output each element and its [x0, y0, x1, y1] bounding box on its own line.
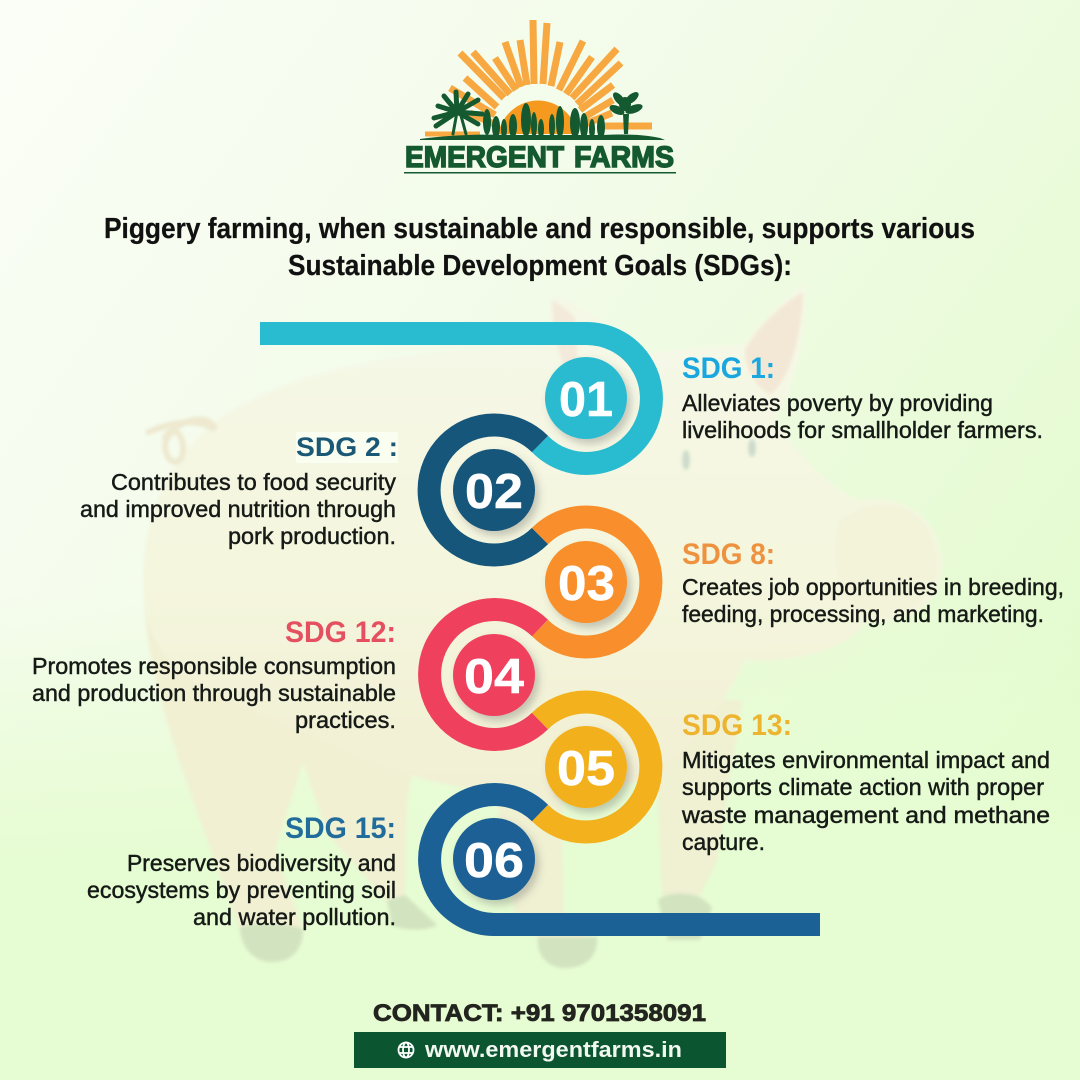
text block: SDG 1: livelihoods for smallholder farmers.: [682, 417, 1043, 443]
ring 03: [540, 517, 651, 647]
ring 04: [430, 610, 540, 739]
pig body: [143, 283, 942, 796]
text block: SDG 15: Preserves biodiversity and: [127, 850, 396, 876]
heading: [104, 213, 975, 282]
text block: SDG 12: SDG 12:: [285, 616, 396, 649]
badge 04: 04: [464, 650, 524, 704]
ring 05: [540, 702, 651, 832]
heading: Piggery farming, when sustainable and responsible, supports various: [104, 213, 975, 245]
badge 04: [453, 634, 535, 716]
text block: SDG 8: [682, 538, 1064, 627]
badge 05: [545, 726, 627, 808]
text block: SDG 13: SDG 13:: [682, 709, 792, 742]
badge 03: 03: [558, 557, 615, 611]
logo wordmark: EMERGENT: [405, 141, 564, 174]
icon: globe: [398, 1042, 414, 1058]
pig hooves: [240, 893, 712, 968]
pig eyes: [682, 439, 756, 470]
pig rear legs: [145, 610, 420, 930]
logo underline: [404, 172, 676, 174]
text block: SDG 2: SDG 2 :: [296, 432, 398, 462]
badge 05: 05: [557, 742, 615, 796]
text block: SDG 12: [32, 616, 396, 733]
pig watermark: [143, 283, 942, 968]
pig front legs: [495, 700, 742, 942]
text block: SDG 8: feeding, processing, and marketing.: [682, 601, 1044, 627]
contact line: CONTACT: +91 9701358091: [373, 1000, 706, 1027]
text block: SDG 2: Contributes to food security: [111, 469, 396, 495]
text block: SDG 1: Alleviates poverty by providing: [682, 390, 993, 416]
text block: SDG 13: waste management and methane: [681, 802, 1050, 828]
heading: Sustainable Development Goals (SDGs):: [288, 250, 792, 282]
logo left palm: [434, 92, 482, 134]
badge 06: [453, 818, 535, 900]
ring 01: [260, 333, 651, 463]
logo wordmark: FARMS: [574, 141, 674, 174]
text block: SDG 13: [681, 709, 1050, 855]
website bar: [354, 1032, 726, 1068]
text block: SDG 15: and water pollution.: [193, 904, 396, 930]
text block: SDG 13: capture.: [682, 829, 765, 855]
logo wordmark: [405, 141, 674, 174]
text block: SDG 12: and production through sustainable: [32, 680, 396, 706]
badge 01: [545, 357, 627, 439]
text block: SDG 15: ecosystems by preventing soil: [87, 877, 396, 903]
text block: SDG 15: SDG 15:: [285, 812, 396, 845]
text block: SDG 1: SDG 1:: [682, 352, 775, 385]
pig snout: [835, 504, 938, 618]
logo small trees and ground: [420, 103, 665, 140]
logo sun: [498, 100, 578, 134]
text block: SDG 2: [80, 432, 398, 549]
logo sun rays: [425, 20, 652, 134]
pig left ear: [552, 300, 580, 400]
pig tail: [146, 419, 215, 462]
pig ear inner: [745, 292, 803, 395]
logo right tree: [608, 90, 644, 134]
text block: SDG 15: [87, 812, 396, 930]
ring 06: [430, 795, 820, 924]
badge 02: [453, 449, 535, 531]
text block: SDG 12: Promotes responsible consumption: [32, 653, 396, 679]
ring 02: [429, 425, 540, 555]
text block: SDG 13: supports climate action with proper: [682, 774, 1044, 800]
text block: SDG 1: [682, 352, 1043, 443]
text block: SDG 2: and improved nutrition through: [80, 496, 396, 522]
text block: SDG 12: practices.: [295, 707, 396, 733]
text block: SDG 8: Creates job opportunities in breeding,: [682, 574, 1064, 600]
text block: SDG 2: pork production.: [228, 523, 396, 549]
badge 02: 02: [465, 465, 523, 519]
serpentine timeline: [260, 333, 820, 924]
badge 06: 06: [464, 834, 524, 888]
logo: [404, 20, 676, 174]
website address: www.emergentfarms.in: [424, 1037, 682, 1062]
badge 01: 01: [559, 373, 613, 427]
badge 03: [545, 541, 627, 623]
text block: SDG 8: SDG 8:: [682, 538, 775, 571]
text block: SDG 13: Mitigates environmental impact and: [682, 747, 1050, 773]
